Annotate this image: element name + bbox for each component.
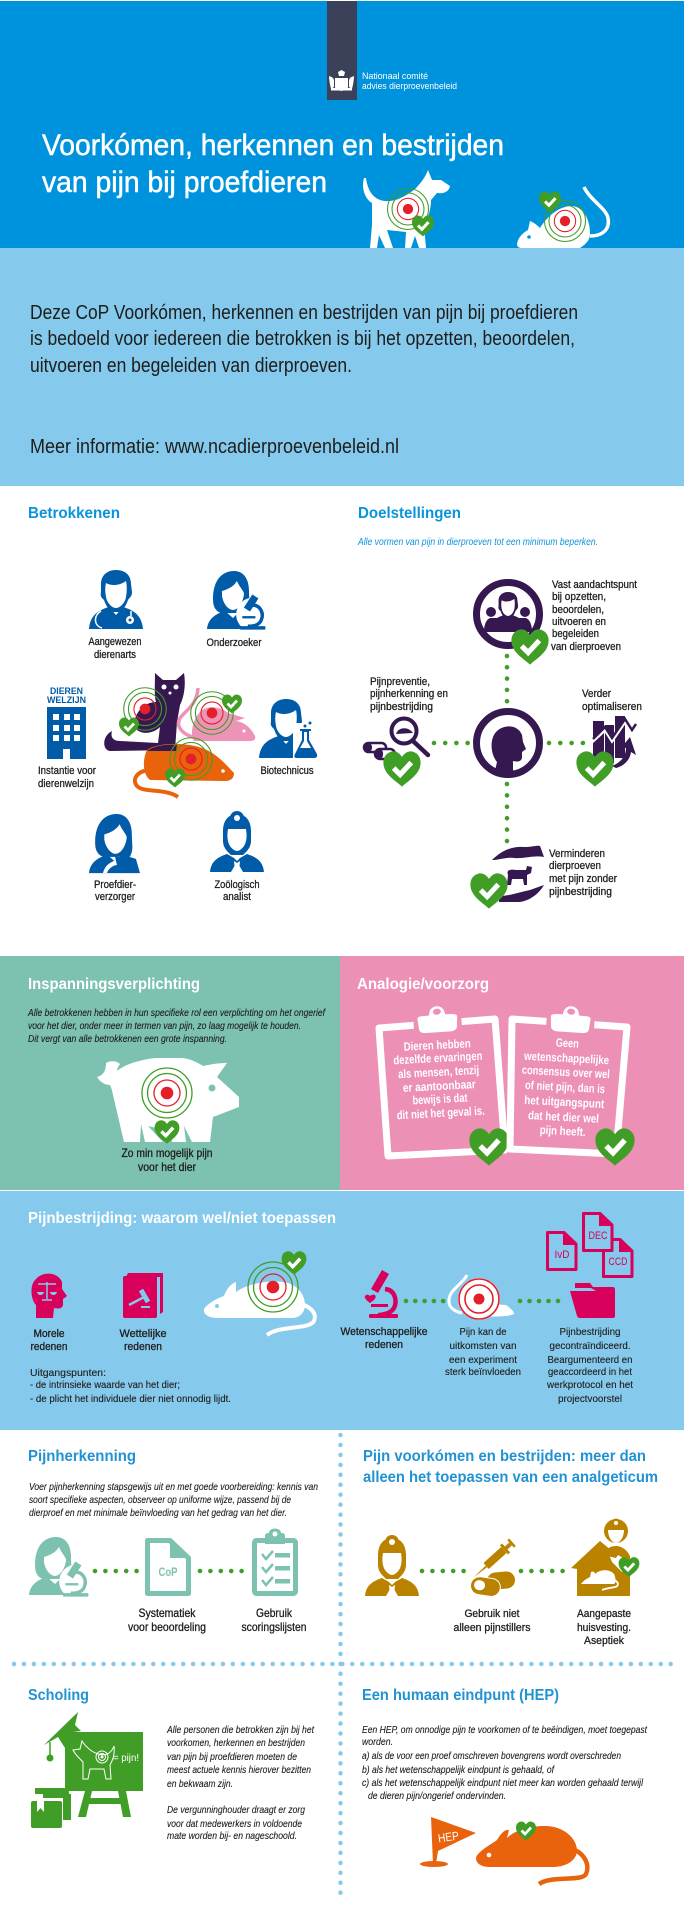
label: Verminderen xyxy=(549,848,605,860)
starting points xyxy=(30,1367,231,1405)
intro text: uitvoeren en begeleiden van dierproeven. xyxy=(30,355,352,377)
label xyxy=(340,1326,428,1351)
icon: top circle with team xyxy=(476,582,549,665)
body text: dierproef en met minimale beïnvloeding van het gedrag van het dier. xyxy=(29,1507,287,1519)
icon: animal welfare building: WELZIJN xyxy=(47,695,86,706)
icon: central head xyxy=(476,712,540,777)
icon: researcher in teal xyxy=(29,1537,93,1598)
icon: cat, mouse and rat with targets xyxy=(104,673,255,797)
dotted connectors xyxy=(422,1569,564,1573)
icon: rising chart xyxy=(576,716,636,787)
icon: school board, cap and books: = pijn! xyxy=(113,1753,139,1764)
label: pijnherkenning en xyxy=(370,688,448,700)
right clipboard: dat het dier wel xyxy=(528,1108,599,1126)
icon: law book and gavel xyxy=(123,1273,163,1318)
label: uitkomsten van xyxy=(450,1340,517,1352)
body text: a) als de voor een proef omschreven bovengrens wordt overschreden xyxy=(362,1750,621,1762)
label: alleen pijnstillers xyxy=(454,1622,531,1634)
label: redenen xyxy=(30,1341,68,1353)
logo text xyxy=(362,71,457,92)
label xyxy=(214,879,260,903)
label: Proefdier- xyxy=(94,879,136,891)
label: voor het dier xyxy=(138,1160,196,1174)
icon: doctor in gold xyxy=(365,1535,419,1596)
dotted connectors xyxy=(95,1569,243,1573)
body text: b) als het wetenschappelijk eindpunt is gehaald, of xyxy=(362,1764,555,1776)
icon: small mouse with red target xyxy=(449,1275,514,1320)
icon: CoP document: CoP xyxy=(158,1565,178,1579)
body text: Alle personen die betrokken zijn bij het xyxy=(166,1724,315,1736)
panel: pijnbestrijding xyxy=(0,1191,684,1430)
label: Zo min mogelijk pijn xyxy=(122,1146,212,1160)
icon: scoring clipboard xyxy=(254,1528,296,1594)
panel: header xyxy=(0,1,684,248)
label: verzorger xyxy=(95,891,135,903)
label: Pijnpreventie, xyxy=(370,676,430,688)
starting points: Uitgangspunten: xyxy=(30,1367,106,1379)
label: pijnbestrijding xyxy=(370,701,433,713)
panel: pijnherkenning xyxy=(28,1448,318,1634)
intro text: Deze CoP Voorkómen, herkennen en bestrijden van pijn bij proefdieren xyxy=(30,302,578,324)
body text: en bekwaam zijn. xyxy=(167,1778,233,1790)
icon: school board, cap and books xyxy=(31,1712,143,1828)
label xyxy=(94,879,136,903)
icon: zoological analyst xyxy=(210,811,264,872)
dotted connectors xyxy=(434,656,584,842)
body text xyxy=(27,1007,326,1045)
icon: CoP document xyxy=(148,1539,190,1594)
intro text xyxy=(30,302,578,377)
label: een experiment xyxy=(449,1354,517,1366)
icon: magnifier and capsules xyxy=(364,718,428,787)
label: huisvesting. xyxy=(577,1622,631,1634)
right clipboard: of niet pijn, dan is xyxy=(525,1078,606,1096)
label xyxy=(370,676,448,713)
label xyxy=(582,688,642,713)
body text: Voer pijnherkenning stapsgewijs uit en met goede voorbereiding: kennis van xyxy=(29,1481,318,1493)
label: optimaliseren xyxy=(582,701,642,713)
icon: animal welfare building xyxy=(47,686,86,759)
label: bij opzetten, xyxy=(552,591,606,603)
icon: head with scales xyxy=(31,1274,67,1318)
panel: een humaan eindpunt xyxy=(362,1687,648,1884)
icon: veterinarian xyxy=(89,570,143,629)
label: geaccordeerd in het xyxy=(548,1366,632,1378)
body text: worden. xyxy=(362,1736,393,1748)
left clipboard: er aantoonbaar xyxy=(402,1077,476,1095)
label xyxy=(445,1326,521,1378)
left clipboard: bewijs is dat xyxy=(412,1091,468,1107)
label: dierenarts xyxy=(94,649,136,661)
icon: folder with documents xyxy=(548,1212,633,1318)
body text: voor dat medewerkers in voldoende xyxy=(167,1818,302,1830)
icon: crest xyxy=(329,70,354,91)
body text xyxy=(166,1724,315,1842)
label: Aangepaste xyxy=(577,1608,631,1620)
body text: Dit vergt van alle betrokkenen een grote inspanning. xyxy=(28,1033,227,1045)
label: Verder xyxy=(582,688,611,700)
right clipboard: het uitgangspunt xyxy=(524,1093,605,1111)
logo ribbon xyxy=(327,1,357,100)
label: Wetenschappelijke xyxy=(340,1326,428,1338)
logo text: Nationaal comité xyxy=(362,71,428,82)
panel: doelstellingen xyxy=(357,505,642,909)
body text xyxy=(362,1724,648,1802)
label: Instantie voor xyxy=(38,765,96,777)
right clipboard xyxy=(510,1005,635,1166)
icon: caretaker xyxy=(89,814,140,873)
icon: animal welfare building: DIEREN xyxy=(50,686,83,697)
label xyxy=(454,1608,531,1634)
body text: De vergunninghouder draagt er zorg xyxy=(167,1804,305,1816)
heading: Pijnherkenning xyxy=(28,1448,136,1465)
label: Systematiek xyxy=(138,1606,196,1620)
label xyxy=(549,848,617,898)
right clipboard: wetenschappelijke xyxy=(523,1049,610,1067)
label xyxy=(30,1328,68,1353)
heading xyxy=(363,1448,658,1486)
label: Biotechnicus xyxy=(260,765,314,777)
starting points: - de plicht het individuele dier niet onnodig lijdt. xyxy=(30,1393,231,1405)
label: dierproeven xyxy=(549,860,601,872)
icon: orange mouse with heart xyxy=(476,1822,587,1884)
label xyxy=(120,1328,166,1353)
logo text: advies dierproevenbeleid xyxy=(362,81,457,92)
label: Onderzoeker xyxy=(206,637,262,649)
label: voor beoordeling xyxy=(128,1620,206,1634)
right clipboard: pijn heeft. xyxy=(539,1123,586,1139)
label xyxy=(577,1608,631,1647)
right clipboard: consensus over wel xyxy=(522,1063,610,1081)
label: Morele xyxy=(34,1328,64,1340)
label: projectvoorstel xyxy=(558,1393,622,1405)
icon: hands protecting dog xyxy=(470,846,544,909)
label: sterk beïnvloeden xyxy=(445,1366,521,1378)
label: beoordelen, xyxy=(552,604,604,616)
left clipboard: dit niet het geval is. xyxy=(396,1104,485,1122)
label xyxy=(551,579,637,653)
label xyxy=(38,765,96,790)
icon: adapted housing xyxy=(571,1518,639,1596)
body text: van pijn bij proefdieren moeten de xyxy=(167,1751,297,1763)
icon: HEP flag xyxy=(420,1817,476,1867)
title: Voorkómen, herkennen en bestrijden xyxy=(42,129,504,162)
icon: pig with target xyxy=(97,1058,239,1144)
icon: white mouse with target xyxy=(204,1251,315,1335)
left clipboard: dezelfde ervaringen xyxy=(393,1049,483,1067)
panel: betrokkenen xyxy=(28,505,319,903)
label xyxy=(122,1146,212,1174)
body text: Alle betrokkenen hebben in hun specifieke rol een verplichting om het ongerief xyxy=(27,1007,326,1019)
panel: scholing xyxy=(28,1687,315,1842)
right clipboard: Geen xyxy=(556,1035,579,1051)
label: Gebruik niet xyxy=(464,1608,520,1620)
label: Pijn kan de xyxy=(460,1326,507,1338)
heading: Inspanningsverplichting xyxy=(28,976,200,993)
label: scoringslijsten xyxy=(242,1620,306,1634)
body text: voor het dier, onder meer in termen van pijn, zo laag mogelijk te houden. xyxy=(28,1020,301,1032)
label: van dierproeven xyxy=(551,641,621,653)
panel: analogie/voorzorg xyxy=(340,956,684,1190)
heading: Pijnbestrijding: waarom wel/niet toepassen xyxy=(28,1210,336,1227)
title: van pijn bij proefdieren xyxy=(42,166,327,199)
starting points: - de intrinsieke waarde van het dier; xyxy=(30,1379,180,1391)
left clipboard: als mensen, tenzij xyxy=(398,1063,479,1081)
intro text: is bedoeld voor iedereen die betrokken is bij het opzetten, beoordelen, xyxy=(30,328,575,350)
label xyxy=(546,1326,633,1405)
heading: Analogie/voorzorg xyxy=(357,976,489,993)
label: Beargumenteerd en xyxy=(548,1354,633,1366)
label: redenen xyxy=(124,1341,162,1353)
icon: mouse with target xyxy=(517,187,608,248)
dotted connectors xyxy=(406,1299,559,1303)
icon: researcher xyxy=(207,571,270,632)
label: Zoölogisch xyxy=(214,879,260,891)
label: uitvoeren en xyxy=(552,616,606,628)
heading: Een humaan eindpunt (HEP) xyxy=(362,1687,559,1704)
label: werkprotocol en het xyxy=(546,1379,633,1391)
label: Aseptiek xyxy=(584,1635,624,1647)
subtitle: Alle vormen van pijn in dierproeven tot een minimum beperken. xyxy=(357,536,598,548)
title xyxy=(42,129,504,199)
heading: Betrokkenen xyxy=(28,505,120,522)
left clipboard: Dieren hebben xyxy=(403,1036,471,1054)
heading: Scholing xyxy=(28,1687,89,1704)
more information: Meer informatie: www.ncadierproevenbeleid.nl xyxy=(30,436,399,458)
label xyxy=(88,636,142,661)
label: analist xyxy=(223,891,251,903)
body text xyxy=(29,1481,318,1519)
panel: inspanningsverplichting xyxy=(0,956,340,1190)
label: Gebruik xyxy=(256,1606,293,1620)
icon: HEP flag: HEP xyxy=(437,1829,460,1845)
body text: soort specifieke aspecten, observeer op uniforme wijze, passend bij de xyxy=(29,1494,291,1506)
label: pijnbestrijding xyxy=(549,886,612,898)
body text: voorkomen, herkennen en bestrijden xyxy=(167,1737,305,1749)
label: Vast aandachtspunt xyxy=(552,579,637,591)
body text: meest actuele kennis hierover bezitten xyxy=(167,1764,311,1776)
label xyxy=(128,1606,206,1634)
icon: syringe and pills xyxy=(469,1538,516,1598)
label: redenen xyxy=(365,1339,403,1351)
body text: mate worden bij- en nageschoold. xyxy=(167,1830,297,1842)
label: Aangewezen xyxy=(88,636,142,648)
panel: introduction xyxy=(0,248,684,486)
label xyxy=(242,1606,306,1634)
icon: dog with target xyxy=(363,170,450,248)
label: dierenwelzijn xyxy=(38,778,94,790)
icon: folder with documents: DEC xyxy=(588,1230,608,1242)
panel: pijn voorkomen en bestrijden xyxy=(363,1448,658,1647)
left clipboard xyxy=(379,1005,509,1166)
body text: de dieren pijn/ongerief ondervinden. xyxy=(368,1790,506,1802)
icon: biotechnician xyxy=(259,699,319,759)
label: gecontraïndiceerd. xyxy=(550,1340,630,1352)
label: met pijn zonder xyxy=(549,873,617,885)
icon: microscope with heart xyxy=(365,1270,398,1318)
heading: Pijn voorkómen en bestrijden: meer dan xyxy=(363,1448,646,1465)
heading: Doelstellingen xyxy=(358,505,461,522)
label: Wettelijke xyxy=(120,1328,166,1340)
icon: folder with documents: IvD xyxy=(554,1249,570,1261)
label: Pijnbestrijding xyxy=(560,1326,621,1338)
heading: alleen het toepassen van een analgeticum xyxy=(363,1469,658,1486)
icon: folder with documents: CCD xyxy=(608,1256,628,1268)
label: begeleiden xyxy=(552,628,599,640)
